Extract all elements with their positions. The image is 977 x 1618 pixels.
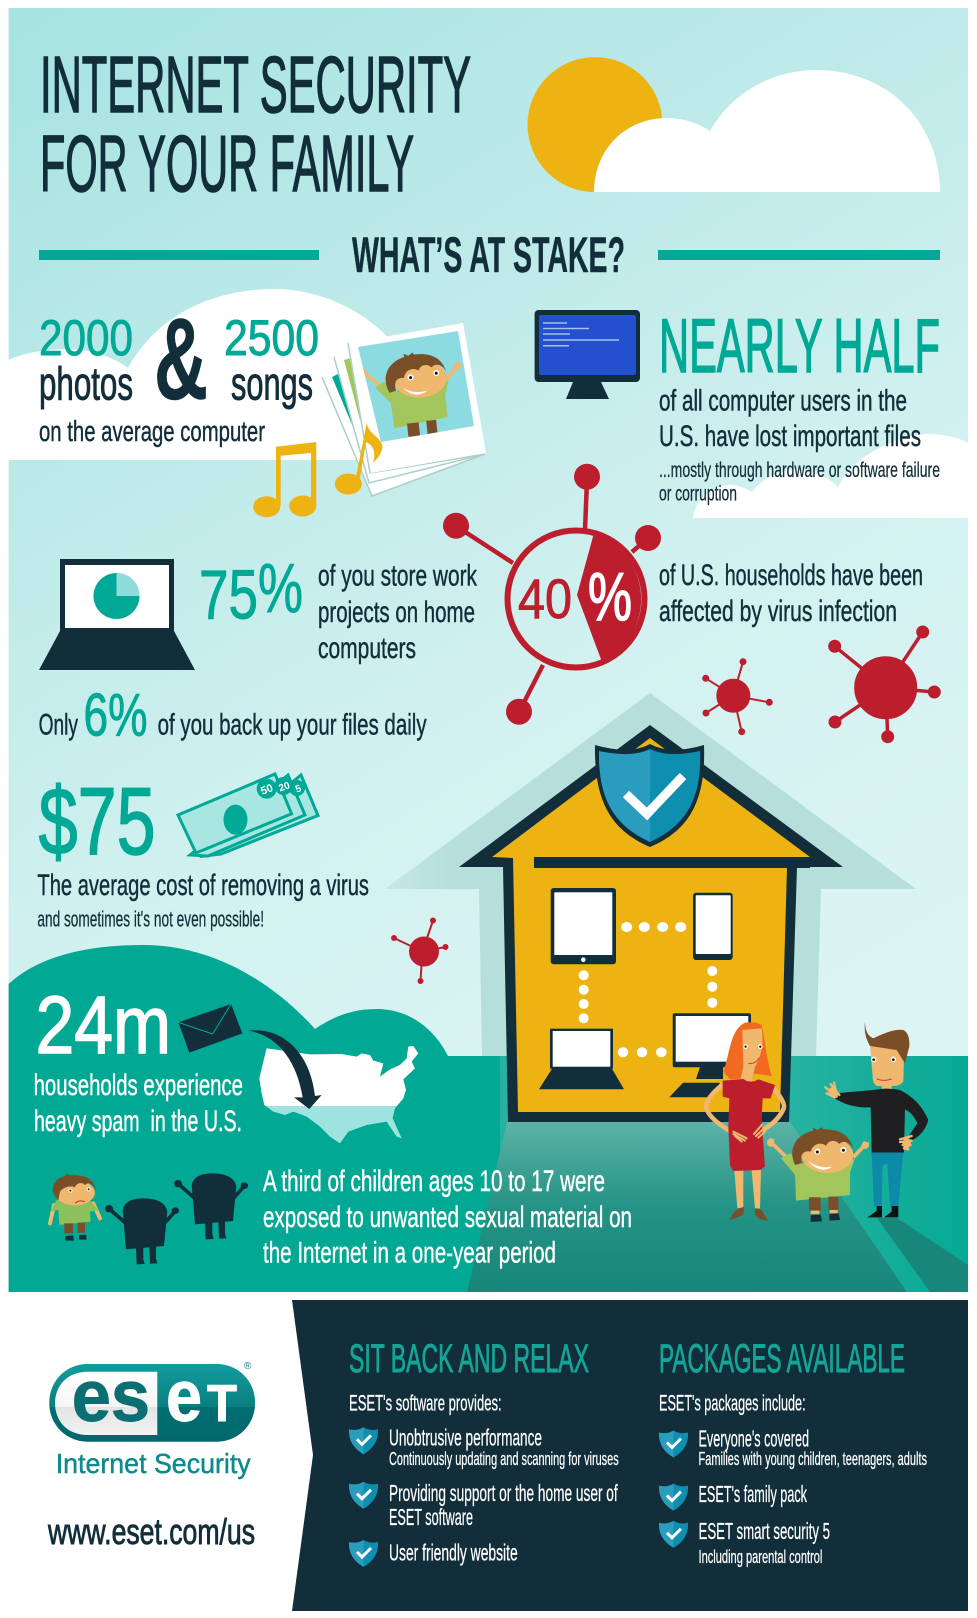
website url: www.eset.com/us: [47, 1511, 255, 1552]
icon: small virus: [392, 918, 448, 984]
column: sit back and relax: Providing support or the home user of: [389, 1480, 618, 1506]
sky background panel: [9, 8, 968, 1292]
icon: desktop computer: [669, 1013, 751, 1097]
panel: product information: [292, 1300, 968, 1611]
right white cloud: [693, 434, 968, 518]
text: children exposure statistic: exposed to unwanted sexual material on: [263, 1201, 632, 1234]
icon: US map with arrow and envelope: [178, 1004, 418, 1143]
title: [40, 40, 471, 208]
title: INTERNET SECURITY: [40, 40, 471, 129]
section heading: what's at stake: [39, 227, 940, 283]
stat: 6 percent back up: of you back up your files daily: [158, 709, 427, 742]
stat: households affected by virus: [659, 559, 923, 628]
stat: 75 percent: %: [258, 549, 303, 627]
figure: boy: [767, 1127, 869, 1222]
stat: 75 dollars: $75: [39, 768, 156, 875]
stat: 6 percent back up: [39, 682, 427, 749]
stat: photos and songs: 2000: [39, 310, 133, 366]
virus chart: 40 percent: 40: [518, 567, 572, 630]
icon: banknotes: [178, 774, 318, 856]
column: packages available: Everyone's covered: [698, 1426, 809, 1452]
column: sit back and relax: User friendly website: [389, 1540, 518, 1566]
icon: laptop with pie chart: [39, 559, 195, 670]
icon: banknotes: 5: [294, 783, 303, 796]
virus chart: 40 percent: [443, 464, 661, 725]
stat: photos and songs: songs: [231, 358, 313, 410]
text: children exposure statistic: [263, 1165, 632, 1270]
stat: photos and songs: [39, 294, 319, 448]
icon: large virus: [829, 626, 940, 743]
column: sit back and relax: ESET's software provides:: [349, 1391, 502, 1416]
icon: sad child: [50, 1173, 100, 1241]
column: packages available: ESET's family pack: [698, 1481, 807, 1507]
house light beam on floor: [467, 1122, 907, 1292]
stat: 75 dollars: [37, 768, 369, 931]
icon: desktop monitor with blue screen: [535, 310, 640, 399]
icon: banknotes: 20: [277, 780, 292, 794]
icon: medium virus: [703, 659, 772, 735]
icon: tablet: [551, 888, 616, 964]
network dots: [579, 922, 717, 1057]
stat: nearly half: [659, 304, 940, 506]
stat: 75 percent: [199, 549, 478, 665]
left white cloud: [9, 289, 400, 460]
stat: 75 percent: projects on home: [318, 596, 475, 629]
figure: man: [825, 1022, 928, 1217]
column: sit back and relax: Unobtrusive performance: [389, 1425, 542, 1451]
column: sit back and relax: [349, 1337, 619, 1567]
icon: banknotes: 50: [259, 782, 275, 798]
ESET logo: e: [166, 1357, 202, 1437]
icon: child silhouette right: [174, 1173, 248, 1239]
icon: envelope: [178, 1004, 242, 1053]
icon: header cloud: [594, 70, 940, 192]
ESET logo: T: [207, 1375, 237, 1433]
man's shadow: [877, 1218, 968, 1292]
column: sit back and relax: ESET software: [389, 1504, 473, 1530]
text: children exposure statistic: A third of children ages 10 to 17 were: [263, 1165, 605, 1198]
stat: 75 percent: computers: [318, 632, 416, 665]
ESET logo: Internet Security: [56, 1448, 251, 1479]
stat: 75 percent: 75: [199, 556, 258, 634]
stat: photos and songs: 2500: [224, 310, 319, 366]
icon: laptop: [539, 1029, 624, 1089]
figure: woman: [706, 1022, 784, 1221]
column: packages available: Including parental control: [698, 1547, 822, 1567]
arrow: [248, 1030, 322, 1109]
stat: 24 million spam: heavy spam in the U.S.: [34, 1105, 242, 1138]
green ground and hills: [9, 945, 968, 1292]
stat: photos and songs: photos: [39, 358, 133, 410]
illustration: family: [706, 1022, 928, 1222]
map: United States: [259, 1046, 418, 1143]
virus chart: 40 percent: %: [588, 559, 632, 635]
icon: phone: [693, 893, 733, 960]
column: sit back and relax: Continuously updating and scanning for viruses: [389, 1449, 619, 1469]
house: [459, 725, 843, 1122]
icon: music notes: [253, 423, 382, 517]
stat: 6 percent back up: Only: [39, 709, 78, 742]
section heading: what's at stake: WHAT’S AT STAKE?: [352, 227, 625, 283]
text: children exposure statistic: the Internet in a one-year period: [263, 1236, 556, 1270]
stat: 75 dollars: The average cost of removing a virus: [37, 869, 369, 902]
ESET logo: [49, 1357, 255, 1479]
ESET logo: es: [72, 1357, 150, 1437]
stat: nearly half: or corruption: [659, 482, 737, 506]
icon: child silhouette left: [105, 1198, 179, 1264]
ESET logo: ®: [244, 1361, 252, 1372]
column: packages available: [659, 1337, 927, 1567]
icon: shield with check: [595, 744, 704, 847]
stat: 24 million spam: households experience: [34, 1069, 243, 1102]
stat: photos and songs: on the average computer: [39, 416, 265, 448]
column: sit back and relax: SIT BACK AND RELAX: [349, 1337, 589, 1381]
icon: stack of photos: [322, 323, 486, 496]
stat: 24 million spam: 24m: [36, 980, 171, 1071]
stat: 75 percent: of you store work: [318, 560, 478, 592]
stat: 24 million spam: [34, 980, 243, 1138]
house backdrop shadow: [385, 693, 916, 1056]
stat: 75 dollars: and sometimes it's not even possible!: [37, 906, 264, 931]
title: FOR YOUR FAMILY: [40, 119, 414, 208]
icon: sun: [528, 57, 662, 192]
column: packages available: ESET smart security 5: [698, 1518, 830, 1544]
stat: 6 percent back up: 6%: [84, 682, 148, 749]
icon: child in photo: [363, 352, 462, 437]
column: packages available: ESET's packages include:: [659, 1391, 806, 1416]
stat: photos and songs: &: [154, 294, 208, 424]
